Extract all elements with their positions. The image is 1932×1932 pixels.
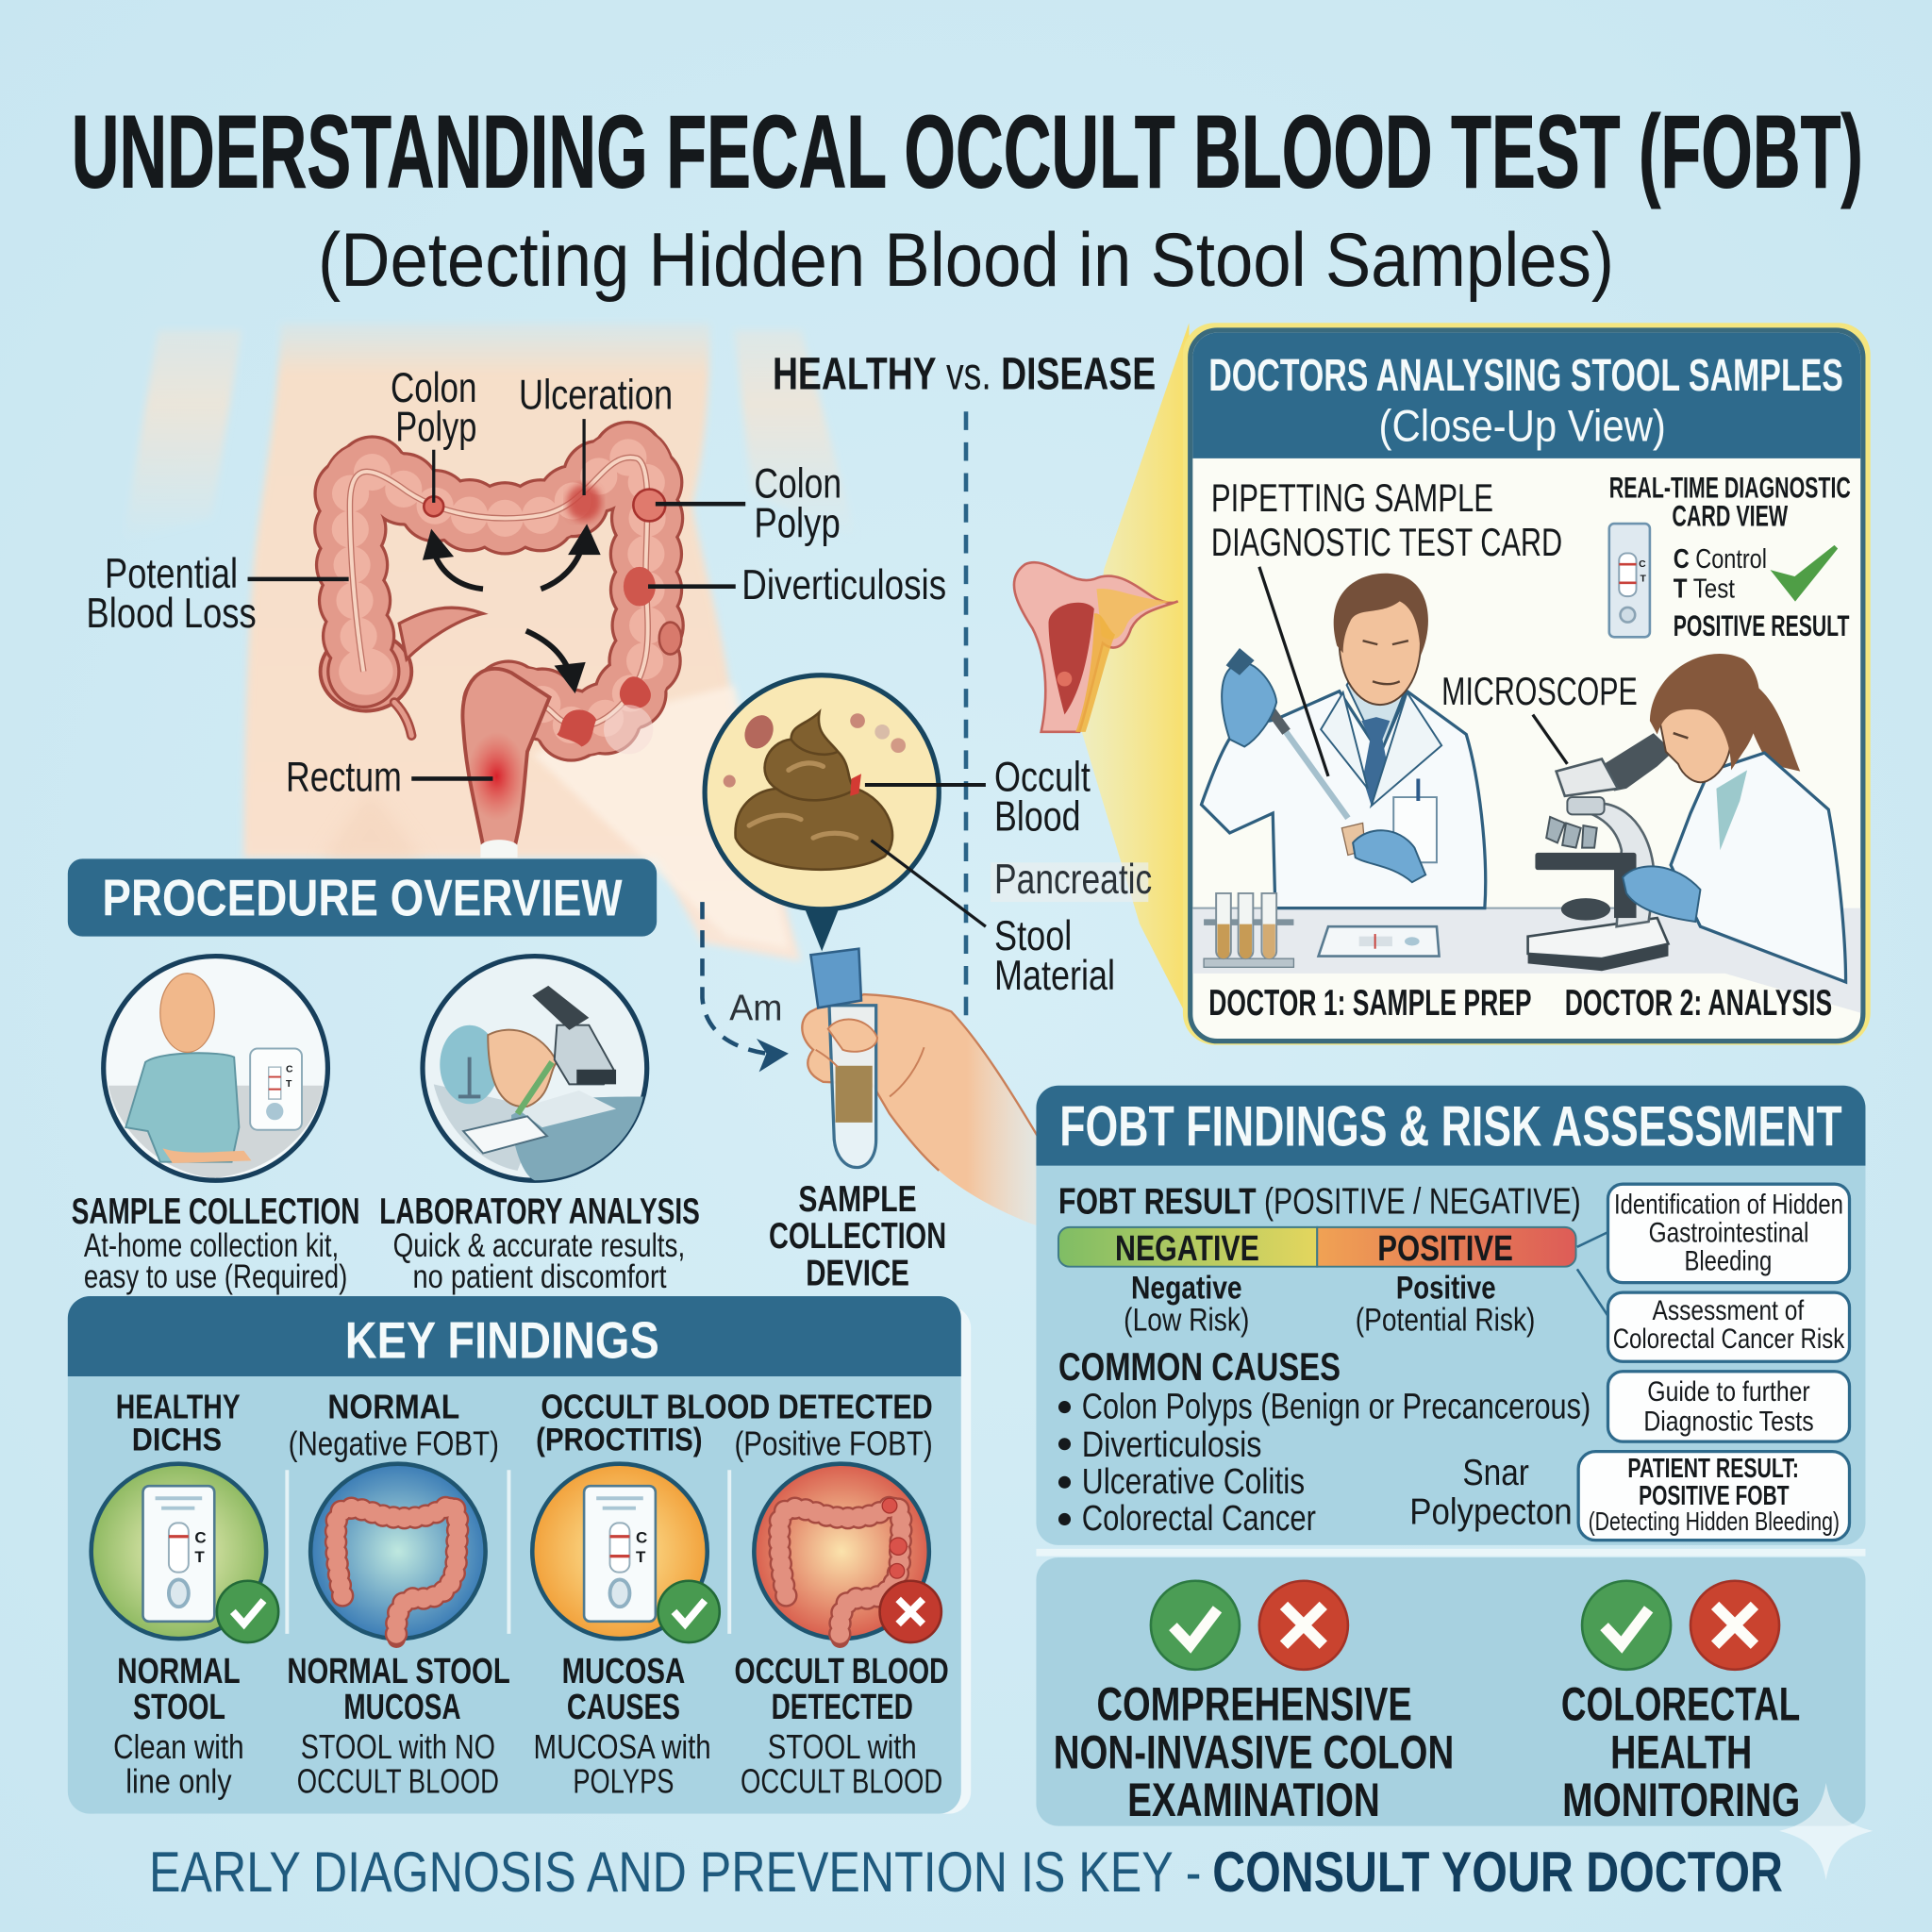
icon: healthy test card bbox=[92, 1464, 266, 1639]
box: identification bbox=[1607, 1184, 1849, 1283]
panel heading: KEY FINDINGS bbox=[345, 1310, 659, 1369]
illustration: doctor 2 bbox=[1623, 654, 1846, 982]
pocket bbox=[1393, 797, 1437, 862]
thumb bbox=[828, 1019, 877, 1052]
illustration: test tube rack bbox=[1204, 893, 1293, 967]
label: laboratory analysis: Quick & accurate results, bbox=[393, 1227, 685, 1264]
label: sample collection device: DEVICE bbox=[806, 1253, 909, 1293]
arrow: dashed to device: Am bbox=[729, 988, 782, 1028]
label: positive: Positive bbox=[1396, 1271, 1496, 1307]
column headers: OCCULT BLOOD DETECTED bbox=[541, 1387, 933, 1425]
label: colon polyp top: Colon bbox=[391, 365, 476, 411]
label: pipetting: DIAGNOSTIC TEST CARD bbox=[1211, 520, 1562, 564]
badge: green check bbox=[217, 1581, 278, 1642]
badge: green check bbox=[658, 1581, 720, 1642]
panel: doctors analysing stool samples bbox=[1183, 323, 1871, 1045]
label: colon polyp right: Colon bbox=[754, 461, 841, 508]
box: patient result bbox=[1578, 1452, 1849, 1541]
icon: sample collection scene bbox=[104, 957, 327, 1180]
icon: healthy test card: T bbox=[194, 1548, 205, 1566]
text: colorectal monitoring bbox=[1561, 1677, 1800, 1826]
illustration: torso with colon anatomy bbox=[124, 323, 858, 961]
left arm bbox=[124, 330, 242, 542]
label: real-time diagnostic card: T bbox=[1640, 574, 1646, 584]
label: diverticulosis: Diverticulosis bbox=[741, 562, 946, 608]
label: sample collection device: COLLECTION bbox=[769, 1216, 946, 1257]
text: column 4: OCCULT BLOOD bbox=[734, 1652, 949, 1691]
box: assessment bbox=[1607, 1292, 1849, 1361]
text: comprehensive examination: COMPREHENSIVE bbox=[1096, 1677, 1412, 1730]
torso silhouette bbox=[244, 323, 801, 961]
icon: sample collection scene: C bbox=[286, 1064, 293, 1074]
text: column 4: OCCULT BLOOD bbox=[741, 1761, 942, 1800]
footer message: EARLY DIAGNOSIS AND PREVENTION IS KEY - bbox=[149, 1840, 1201, 1904]
label: colon polyp right: Polyp bbox=[754, 500, 841, 546]
text: colorectal monitoring: MONITORING bbox=[1562, 1774, 1800, 1826]
label: real-time diagnostic card: C bbox=[1639, 559, 1646, 570]
text: column 2: NORMAL STOOL bbox=[287, 1652, 510, 1691]
label: stool material: Stool bbox=[994, 913, 1072, 959]
illustration: magnified stool sample bbox=[705, 675, 939, 951]
icon: diseased colon bbox=[754, 1464, 929, 1639]
icon: positive test card: T bbox=[636, 1548, 646, 1566]
box: assessment: Colorectal Cancer Risk bbox=[1613, 1324, 1845, 1355]
common causes list: Diverticulosis bbox=[1082, 1425, 1261, 1465]
raised glove bbox=[1222, 662, 1276, 747]
label: rectum: Rectum bbox=[286, 755, 402, 801]
badge: red cross bbox=[880, 1581, 941, 1642]
label: real-time diagnostic card bbox=[1609, 472, 1851, 642]
text: column 3: POLYPS bbox=[573, 1761, 674, 1800]
result bar bbox=[1058, 1227, 1576, 1269]
box: guide: Diagnostic Tests bbox=[1643, 1406, 1814, 1437]
label: laboratory analysis: LABORATORY ANALYSIS bbox=[379, 1191, 700, 1232]
glove bbox=[1623, 866, 1700, 922]
label: snare polypectomy: Snar bbox=[1462, 1453, 1529, 1493]
box: patient result: POSITIVE FOBT bbox=[1639, 1481, 1790, 1511]
head bbox=[1340, 581, 1421, 705]
lapels bbox=[1321, 692, 1441, 806]
text: column 1 bbox=[113, 1652, 244, 1800]
label: positive: (Potential Risk) bbox=[1356, 1303, 1535, 1339]
tie bbox=[1361, 717, 1390, 806]
result bar: POSITIVE bbox=[1377, 1229, 1513, 1269]
tube bbox=[829, 1006, 876, 1168]
text: column 2: OCCULT BLOOD bbox=[297, 1761, 499, 1800]
common causes list: Ulcerative Colitis bbox=[1082, 1462, 1305, 1502]
flow arrows bbox=[426, 530, 596, 688]
column headers: DICHS bbox=[132, 1422, 222, 1457]
label: snare polypectomy: Polypecton bbox=[1409, 1492, 1573, 1533]
column headers: (Negative FOBT) bbox=[289, 1424, 499, 1463]
label: negative bbox=[1124, 1271, 1249, 1339]
box: guide: Guide to further bbox=[1647, 1376, 1810, 1407]
text: column 2: STOOL with NO bbox=[301, 1727, 495, 1766]
column headers: NORMAL bbox=[327, 1387, 459, 1425]
panel: FOBT findings and risk assessment bbox=[1036, 1086, 1865, 1545]
panel subheading: (Close-Up View) bbox=[1379, 401, 1666, 451]
text: column 4 bbox=[734, 1652, 949, 1800]
label: sample collection: At-home collection kit, bbox=[84, 1227, 339, 1264]
label: snare polypectomy bbox=[1409, 1453, 1573, 1533]
illustration: microscope bbox=[1528, 733, 1674, 971]
label: stool material: Material bbox=[994, 953, 1115, 999]
label: microscope bbox=[1441, 669, 1638, 764]
label: negative: (Low Risk) bbox=[1124, 1303, 1249, 1339]
illustration: test card on bench bbox=[1319, 926, 1440, 957]
icon: healthy test card: C bbox=[194, 1528, 207, 1546]
callout beam: yellow bbox=[1082, 323, 1195, 1033]
column headers: HEALTHY bbox=[116, 1387, 241, 1425]
text: column 4: STOOL with bbox=[768, 1727, 917, 1766]
rectum bbox=[462, 669, 550, 845]
common causes list: Colorectal Cancer bbox=[1082, 1499, 1316, 1539]
label: pipetting bbox=[1211, 475, 1562, 776]
label: sample collection: easy to use (Required) bbox=[84, 1258, 347, 1295]
text: column 2 bbox=[287, 1652, 510, 1800]
bubble bbox=[604, 705, 653, 754]
label: sample collection device bbox=[769, 1179, 946, 1293]
icon: check bbox=[1582, 1581, 1671, 1670]
icon: positive test card: C bbox=[636, 1528, 647, 1546]
label: potential blood loss: Potential bbox=[105, 551, 238, 597]
label: pipetting: PIPETTING SAMPLE bbox=[1211, 475, 1493, 520]
label: ulceration: Ulceration bbox=[519, 373, 673, 419]
column headers bbox=[116, 1387, 933, 1463]
label: laboratory analysis bbox=[379, 1191, 700, 1295]
dividers bbox=[287, 1470, 729, 1634]
box: identification: Identification of Hidden bbox=[1614, 1190, 1843, 1221]
icon: cross bbox=[1259, 1581, 1348, 1670]
lesions bbox=[424, 496, 443, 516]
text: colorectal monitoring: HEALTH bbox=[1610, 1725, 1752, 1778]
text: comprehensive examination bbox=[1054, 1677, 1454, 1826]
text: column 1: NORMAL bbox=[117, 1652, 241, 1691]
illustration: hand holding tube bbox=[802, 949, 1038, 1226]
label: occult blood: Blood bbox=[994, 793, 1080, 840]
poop bbox=[736, 712, 892, 870]
icon: laboratory analysis scene bbox=[423, 957, 647, 1180]
box: identification: Gastrointestinal bbox=[1649, 1218, 1808, 1249]
illustration: doctor 1 bbox=[1201, 574, 1486, 908]
heading: healthy vs disease: HEALTHY vs. DISEASE bbox=[773, 349, 1156, 400]
heading: procedure overview bbox=[68, 858, 657, 937]
shirt bbox=[1347, 672, 1407, 754]
icon: sample collection scene: T bbox=[286, 1079, 292, 1090]
label: real-time diagnostic card: T Test bbox=[1674, 574, 1735, 604]
text: column 3: MUCOSA bbox=[562, 1652, 685, 1691]
coat body bbox=[1201, 691, 1486, 908]
text: column 4: DETECTED bbox=[772, 1688, 913, 1727]
result heading: FOBT RESULT (POSITIVE / NEGATIVE) bbox=[1058, 1182, 1581, 1223]
arrow: dashed to device bbox=[702, 902, 789, 1072]
divider bbox=[964, 411, 968, 1023]
label: potential blood loss bbox=[86, 551, 349, 637]
icon: normal colon bbox=[310, 1464, 486, 1639]
panel frame bbox=[1183, 323, 1871, 1045]
text: comprehensive examination: EXAMINATION bbox=[1127, 1774, 1380, 1826]
label: sample collection: SAMPLE COLLECTION bbox=[72, 1191, 359, 1232]
box: assessment: Assessment of bbox=[1653, 1295, 1805, 1326]
right arm bbox=[734, 330, 858, 542]
text: column 3 bbox=[534, 1652, 711, 1800]
caption: doctor 1: DOCTOR 1: SAMPLE PREP bbox=[1208, 983, 1532, 1024]
cap bbox=[810, 949, 861, 1008]
box: guide bbox=[1607, 1372, 1849, 1441]
text: column 1: STOOL bbox=[133, 1688, 225, 1727]
label: stool material bbox=[871, 841, 1115, 999]
label: real-time diagnostic card: C Control bbox=[1674, 544, 1767, 575]
face bbox=[1659, 699, 1731, 782]
footer message: CONSULT YOUR DOCTOR bbox=[1212, 1840, 1783, 1904]
knuckles bbox=[816, 1047, 924, 1096]
heading: procedure overview: PROCEDURE OVERVIEW bbox=[102, 868, 623, 926]
panel: key findings bbox=[68, 1296, 971, 1814]
text: column 3: MUCOSA with bbox=[534, 1727, 711, 1766]
pipette bbox=[1269, 708, 1348, 818]
label: laboratory analysis: no patient discomfort bbox=[413, 1258, 667, 1295]
icon: cross bbox=[1690, 1581, 1779, 1670]
common causes list: COMMON CAUSES bbox=[1058, 1344, 1341, 1389]
appendix tail bbox=[399, 608, 483, 659]
label: sample collection bbox=[72, 1191, 359, 1295]
box: patient result: PATIENT RESULT: bbox=[1627, 1454, 1799, 1484]
bench bbox=[1192, 908, 1860, 1013]
label: colon polyp top: Polyp bbox=[395, 405, 476, 451]
label: colon polyp right bbox=[656, 461, 841, 546]
icon: check bbox=[1151, 1581, 1240, 1670]
hand bbox=[802, 994, 1038, 1226]
label: sample collection device: SAMPLE bbox=[798, 1179, 917, 1220]
label: real-time diagnostic card: CARD VIEW bbox=[1672, 500, 1788, 533]
pelvis shading bbox=[532, 685, 789, 949]
icon: diseased colon section bbox=[1014, 562, 1178, 732]
subtitle: (Detecting Hidden Blood in Stool Samples) bbox=[318, 218, 1614, 303]
text: column 1: Clean with bbox=[113, 1727, 244, 1766]
cup bbox=[1341, 823, 1365, 855]
text: comprehensive examination: NON-INVASIVE COLON bbox=[1054, 1725, 1454, 1778]
ponytail bbox=[1743, 677, 1800, 772]
box: patient result: (Detecting Hidden Bleeding) bbox=[1589, 1507, 1840, 1536]
text: column 3: CAUSES bbox=[567, 1688, 680, 1727]
label: potential blood loss: Blood Loss bbox=[86, 591, 257, 637]
right glove bbox=[1353, 830, 1425, 882]
coat bbox=[1671, 753, 1846, 982]
panel: benefits bbox=[1036, 1549, 1865, 1826]
label: real-time diagnostic card: POSITIVE RESULT bbox=[1674, 609, 1849, 642]
common causes list: Colon Polyps (Benign or Precancerous) bbox=[1082, 1387, 1591, 1426]
icon: sparkle bbox=[1779, 1783, 1873, 1880]
result bar: NEGATIVE bbox=[1115, 1229, 1259, 1269]
text: column 1: line only bbox=[125, 1761, 232, 1800]
common causes list bbox=[1058, 1344, 1591, 1539]
box: identification: Bleeding bbox=[1684, 1246, 1772, 1277]
hair bbox=[1650, 654, 1759, 770]
connector lines bbox=[1577, 1232, 1607, 1316]
column headers: (Positive FOBT) bbox=[734, 1424, 933, 1463]
icon: positive test card bbox=[532, 1464, 708, 1639]
label: negative: Negative bbox=[1131, 1271, 1242, 1307]
label: occult blood: Occult bbox=[994, 755, 1091, 801]
label: microscope: MICROSCOPE bbox=[1441, 669, 1638, 713]
text: colorectal monitoring: COLORECTAL bbox=[1561, 1677, 1800, 1730]
label: colon polyp top bbox=[391, 365, 476, 503]
label: pancreatic: Pancreatic bbox=[994, 857, 1152, 903]
column headers: (PROCTITIS) bbox=[536, 1422, 702, 1457]
colon large intestine bbox=[321, 458, 681, 858]
text: column 2: MUCOSA bbox=[343, 1688, 460, 1727]
label: positive bbox=[1356, 1271, 1535, 1339]
label: occult blood bbox=[865, 755, 1091, 840]
